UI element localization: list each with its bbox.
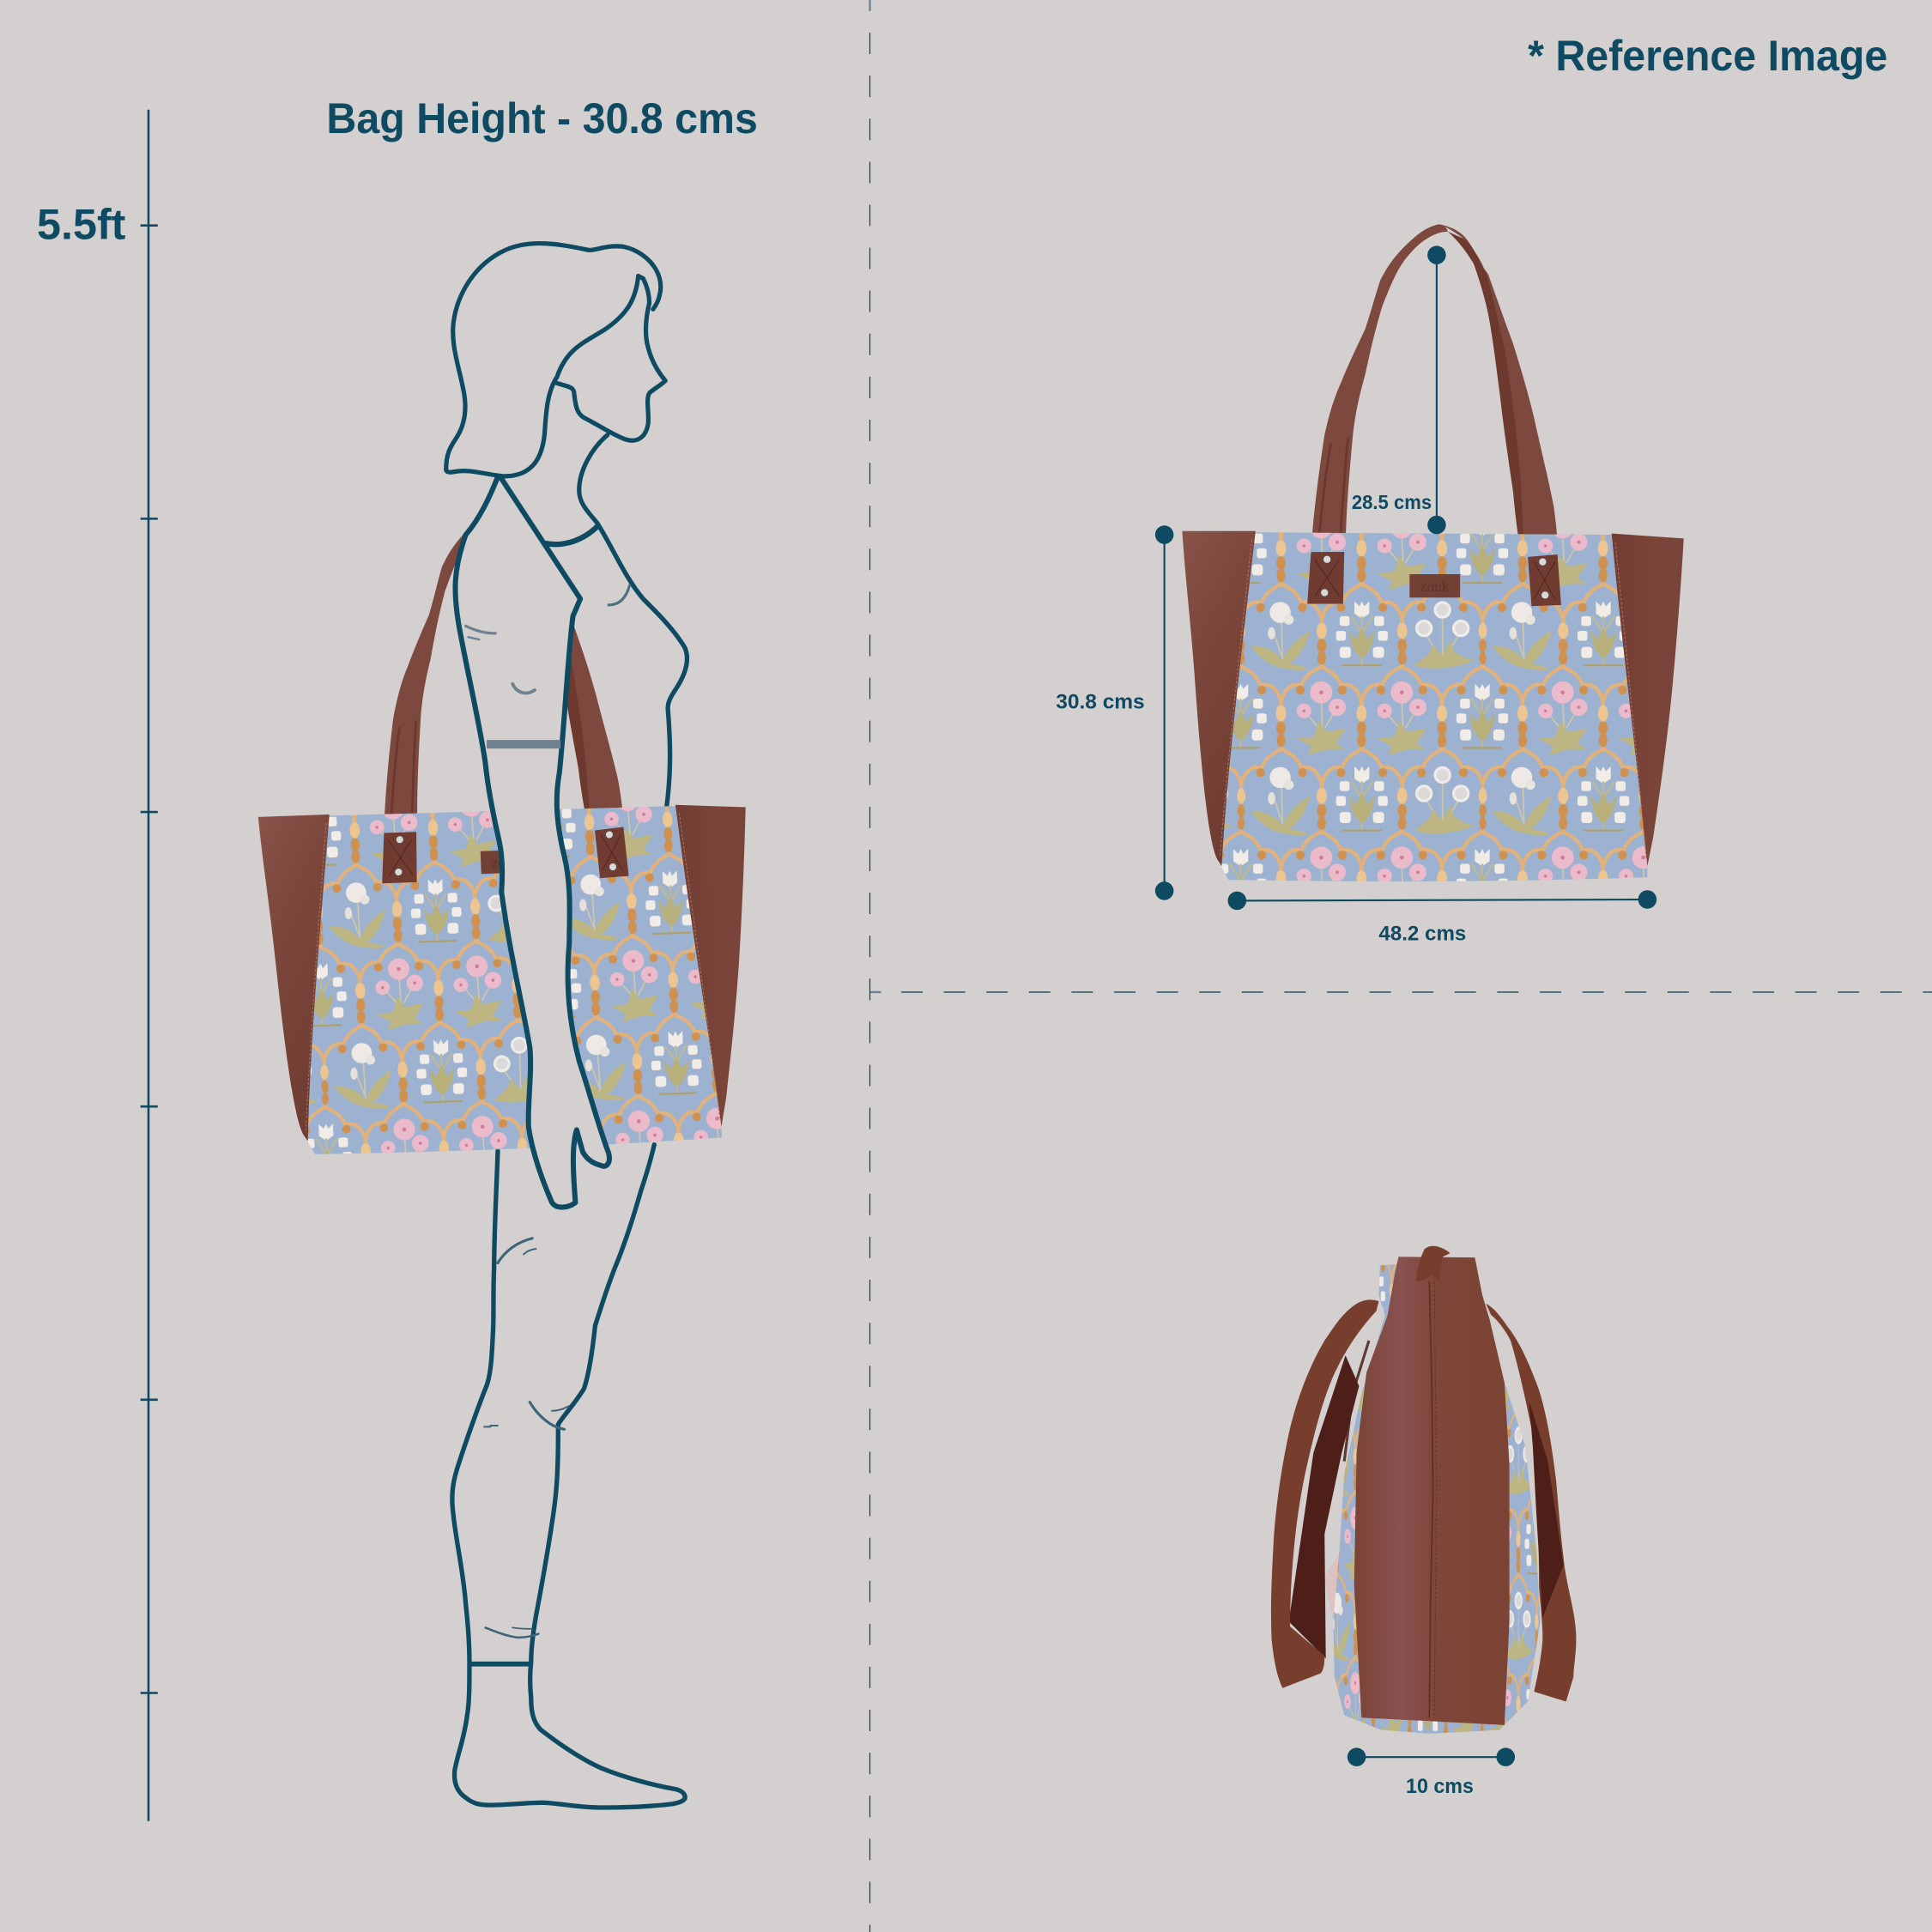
title: bag height: Bag Height - 30.8 cms [326, 94, 758, 142]
figure head and neck [446, 244, 665, 544]
front view bag [1182, 224, 1684, 881]
dimension: handle drop 28.5 cms [1352, 245, 1446, 534]
note: reference image: * Reference Image [1528, 32, 1887, 80]
height ruler [141, 110, 158, 1821]
figure arm and torso [455, 477, 609, 1208]
dimension: width 48.2 cms: 48.2 cms [1378, 922, 1466, 945]
dimension: depth 10 cms: 10 cms [1406, 1775, 1474, 1798]
tote bag worn on figure [248, 502, 757, 1157]
figure body creases [466, 585, 630, 744]
dimension: height 30.8 cms: 30.8 cms [1056, 690, 1145, 713]
side view bag [1271, 1246, 1576, 1734]
dimension: width 48.2 cms [1228, 890, 1656, 945]
dimension: handle drop 28.5 cms: 28.5 cms [1352, 491, 1432, 513]
figure outline: chest and legs [452, 524, 687, 1808]
ruler label: 5.5ft: 5.5ft [37, 201, 126, 249]
dimension: depth 10 cms [1348, 1747, 1515, 1798]
dimension: height 30.8 cms [1056, 525, 1173, 900]
